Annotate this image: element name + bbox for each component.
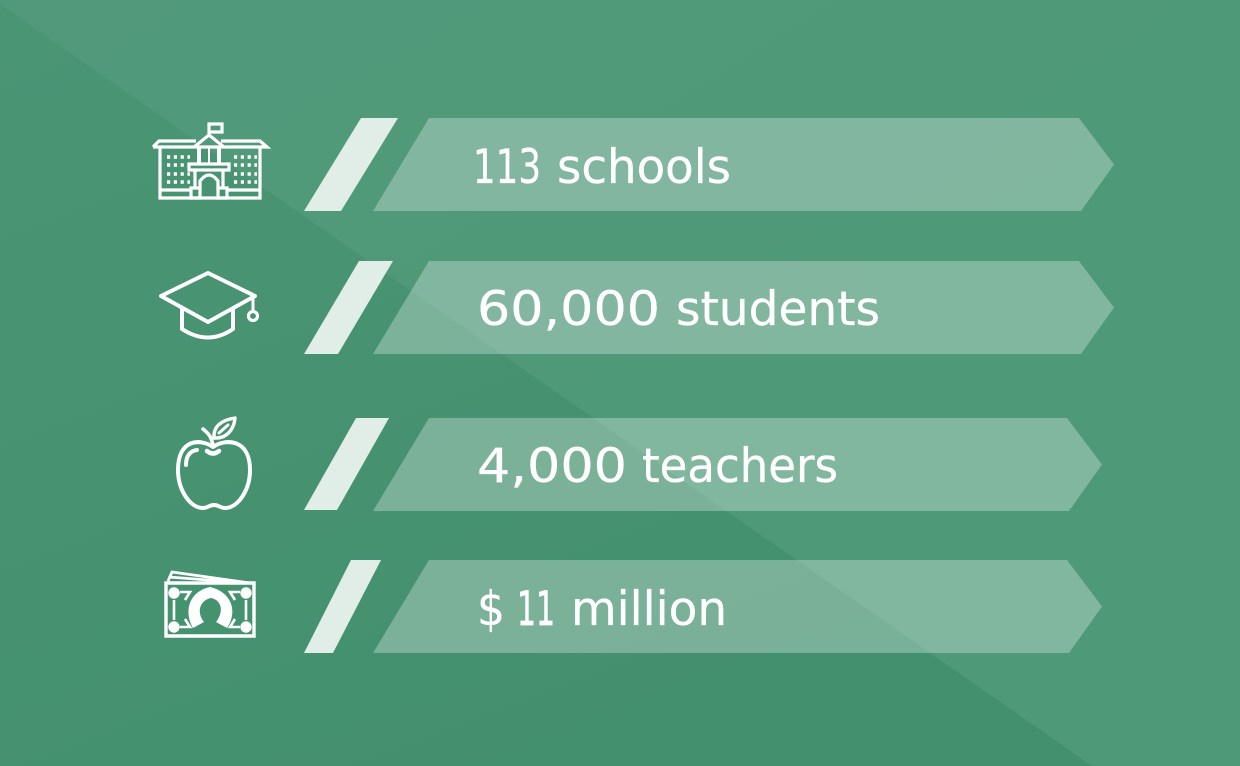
- icon: apple: [178, 418, 250, 508]
- arrow banner: [373, 261, 1114, 354]
- row: funding: [166, 560, 1102, 653]
- icon: banknotes: [166, 572, 254, 636]
- row: students: [161, 261, 1114, 354]
- arrow banner: [373, 418, 1102, 511]
- label: 60,000: [477, 282, 660, 337]
- label: teachers: [642, 439, 838, 494]
- label: 113: [473, 140, 541, 195]
- arrow banner: [373, 560, 1102, 653]
- row: schools: [153, 118, 1114, 211]
- label: [477, 282, 880, 337]
- arrow banner: [373, 118, 1114, 211]
- icon: graduation cap: [161, 273, 258, 338]
- label: million: [571, 582, 727, 637]
- label: schools: [557, 140, 731, 195]
- label: [477, 582, 727, 637]
- label: $: [477, 582, 505, 637]
- slash: [304, 418, 389, 510]
- label: [473, 140, 731, 195]
- slash: [304, 560, 381, 653]
- label: 4,000: [477, 439, 627, 494]
- slash: [304, 261, 393, 354]
- label: students: [676, 282, 880, 337]
- slash: [304, 118, 398, 211]
- icon: school building: [153, 124, 267, 198]
- label: 11: [517, 582, 555, 637]
- label: [477, 439, 838, 494]
- row: teachers: [178, 418, 1102, 511]
